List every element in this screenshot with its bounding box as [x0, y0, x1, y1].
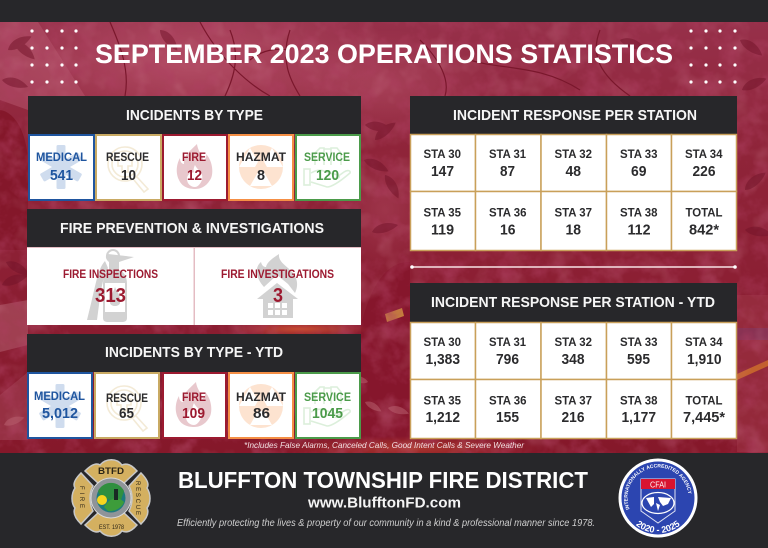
station grid: STA 33	[620, 147, 658, 161]
card: medical ytd: MEDICAL	[34, 389, 85, 403]
heading: incident response per station	[410, 96, 737, 134]
station grid ytd: STA 35	[424, 394, 461, 408]
station grid ytd: 796	[496, 351, 519, 368]
footer tagline: Efficiently protecting the lives & property of our community in a kind & professional manner since 1978.	[177, 518, 595, 529]
station grid: 69	[631, 163, 646, 180]
card: fire: 12	[187, 167, 202, 184]
card: fire ytd: 109	[182, 405, 205, 422]
heading: incident response per station ytd	[410, 283, 737, 322]
footnote: *Includes False Alarms, Canceled Calls, Good Intent Calls & Severe Weather	[244, 440, 525, 450]
station grid	[410, 134, 736, 250]
stat: fire investigations: FIRE INVESTIGATIONS	[221, 267, 334, 281]
station grid: 16	[500, 222, 516, 238]
station grid: STA 30	[424, 147, 461, 161]
card: hazmat: 8	[257, 167, 265, 184]
logo: CFAI accreditation seal	[618, 458, 698, 538]
stat: fire inspections: FIRE INSPECTIONS	[63, 267, 158, 281]
heading: fire prevention and investigations	[27, 209, 361, 247]
logo: CFAI accreditation seal: INTERNATIONALLY ACCREDITED AGENCY	[624, 464, 692, 510]
card: hazmat: HAZMAT	[236, 150, 287, 164]
station grid ytd: 348	[562, 351, 584, 368]
card: service: SERVICE	[304, 150, 350, 164]
heading: incident response per station ytd: INCIDENT RESPONSE PER STATION - YTD	[431, 294, 715, 311]
station grid ytd: 7,445*	[683, 409, 725, 426]
station grid ytd: STA 31	[489, 335, 526, 349]
dot grid left	[30, 29, 78, 84]
heading: incidents by type: INCIDENTS BY TYPE	[126, 107, 263, 124]
card: medical: MEDICAL	[36, 150, 87, 164]
station grid: 87	[500, 163, 515, 180]
heading: incident response per station: INCIDENT RESPONSE PER STATION	[453, 107, 697, 124]
card: hazmat	[229, 135, 293, 200]
icon: fire extinguisher	[87, 250, 134, 322]
card: service	[296, 135, 360, 200]
card: medical ytd: 5,012	[42, 405, 78, 422]
station grid: STA 34	[685, 147, 723, 161]
card: rescue ytd	[95, 373, 159, 438]
logo: CFAI accreditation seal: 2020 - 2025	[636, 520, 680, 533]
card: fire ytd: FIRE	[182, 390, 206, 404]
station grid: STA 35	[424, 206, 461, 220]
card: service: 120	[316, 167, 339, 184]
stat: fire inspections	[63, 250, 158, 322]
card: service ytd	[296, 373, 360, 438]
logo: BTFD maltese cross badge: BTFD	[98, 466, 124, 477]
footer website: www.BlufftonFD.com	[307, 494, 461, 512]
card: fire: FIRE	[182, 150, 206, 164]
station grid ytd: 1,383	[426, 351, 460, 368]
station grid: 48	[566, 163, 581, 180]
card: fire	[163, 135, 227, 200]
card: hazmat ytd	[229, 373, 293, 438]
logo: BTFD maltese cross badge	[72, 460, 150, 536]
station grid: 119	[431, 222, 454, 238]
station grid: STA 32	[554, 147, 592, 161]
card: rescue: 10	[121, 167, 136, 184]
dot grid right	[689, 29, 737, 84]
panel: fire prevention and investigations	[27, 209, 361, 325]
card: rescue ytd: 65	[119, 405, 134, 422]
station grid ytd: STA 32	[554, 335, 592, 349]
footer bar	[0, 453, 768, 548]
stat: fire investigations: 3	[273, 285, 283, 307]
station grid: STA 37	[554, 206, 592, 220]
title: SEPTEMBER 2023 OPERATIONS STATISTICS	[95, 39, 673, 69]
station grid ytd	[410, 322, 736, 438]
station grid: TOTAL	[686, 206, 723, 220]
icon: house on fire	[257, 254, 298, 318]
station grid ytd: TOTAL	[686, 394, 723, 408]
panel: incident response per station ytd	[410, 283, 737, 438]
card: medical: 541	[50, 167, 73, 184]
panel: incidents by type	[28, 96, 361, 200]
station grid: STA 31	[489, 147, 526, 161]
station grid ytd: STA 34	[685, 335, 723, 349]
station grid ytd: STA 38	[620, 394, 658, 408]
heading: fire prevention and investigations: FIRE PREVENTION & INVESTIGATIONS	[60, 220, 324, 237]
card: rescue ytd: RESCUE	[106, 391, 148, 405]
card: rescue	[96, 135, 161, 200]
station grid ytd: STA 30	[424, 335, 461, 349]
station grid ytd: 1,910	[687, 351, 722, 368]
divider with end dots	[410, 265, 737, 269]
station grid ytd: 155	[496, 409, 519, 426]
card: fire ytd	[163, 373, 226, 438]
card: rescue: RESCUE	[106, 150, 149, 164]
station grid: 18	[566, 222, 581, 238]
heading: incidents by type ytd	[27, 334, 361, 372]
card: hazmat ytd: HAZMAT	[236, 390, 287, 404]
station grid: 226	[692, 163, 716, 180]
heading: incidents by type ytd: INCIDENTS BY TYPE - YTD	[105, 344, 283, 361]
card: medical ytd	[28, 373, 92, 438]
station grid ytd: 1,177	[622, 409, 656, 426]
station grid ytd: 216	[562, 409, 584, 426]
card: medical	[29, 135, 94, 200]
stat: fire inspections: 313	[95, 285, 126, 307]
station grid: 147	[431, 163, 454, 180]
logo: BTFD maltese cross badge: FIRE	[78, 486, 84, 508]
station grid ytd: STA 33	[620, 335, 658, 349]
card: service ytd: 1045	[312, 405, 343, 422]
station grid ytd: 1,212	[426, 409, 460, 426]
station grid ytd: 595	[627, 351, 650, 368]
stat: fire investigations	[221, 254, 334, 318]
station grid: STA 38	[620, 206, 658, 220]
logo: CFAI accreditation seal: CFAI	[650, 480, 666, 490]
logo: BTFD maltese cross badge: EST. 1978	[99, 524, 124, 531]
station grid: 842*	[689, 222, 719, 238]
heading: incidents by type	[28, 96, 361, 134]
station grid: 112	[628, 222, 650, 238]
logo: BTFD maltese cross badge: RESCUE	[134, 481, 140, 515]
station grid ytd: STA 37	[554, 394, 592, 408]
panel: incident response per station	[410, 96, 737, 250]
panel: incidents by type ytd	[27, 334, 361, 438]
card: service ytd: SERVICE	[304, 390, 351, 404]
station grid: STA 36	[489, 206, 527, 220]
card: hazmat ytd: 86	[253, 405, 270, 422]
footer district name: BLUFFTON TOWNSHIP FIRE DISTRICT	[178, 467, 588, 493]
top bar	[0, 0, 768, 22]
station grid ytd: STA 36	[489, 394, 527, 408]
